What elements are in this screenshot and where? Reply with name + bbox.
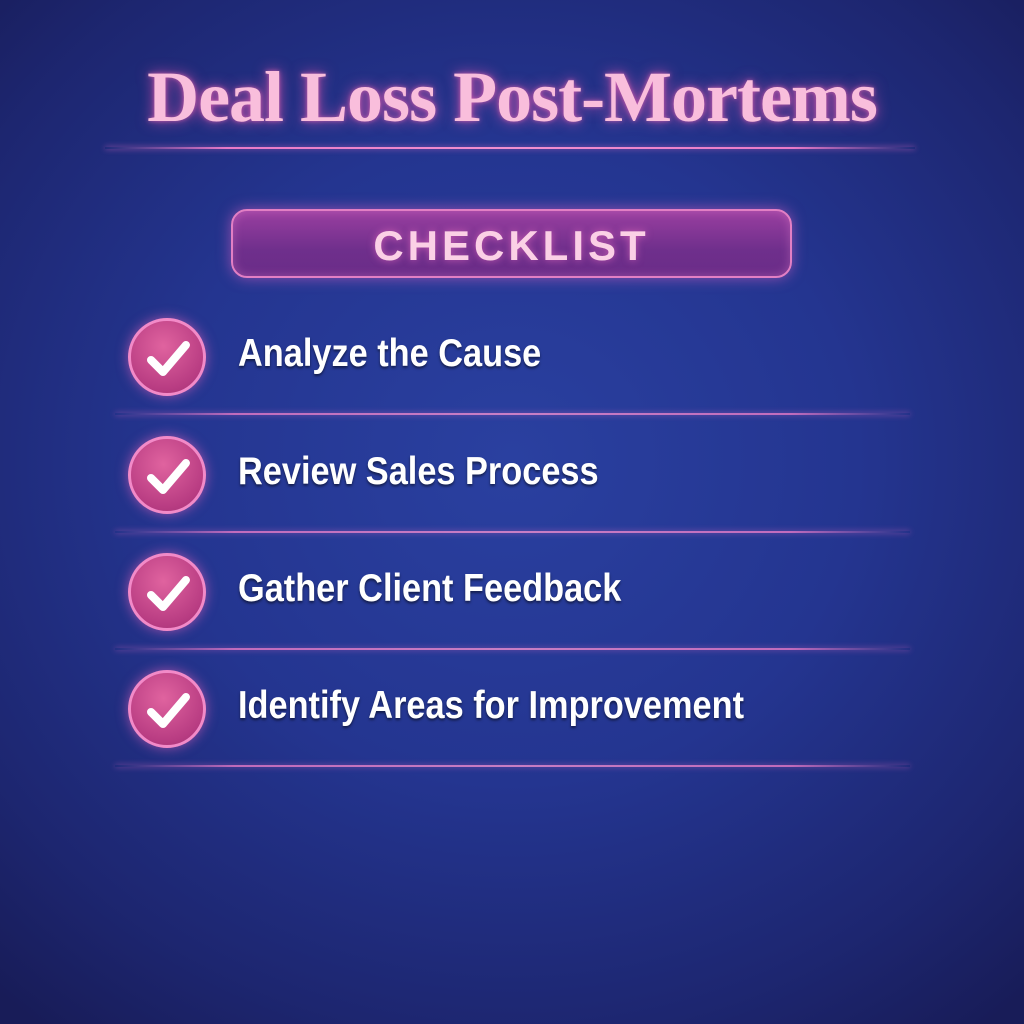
checklist header pill xyxy=(231,209,792,278)
title: Deal Loss Post-Mortems xyxy=(147,57,877,137)
item 2 xyxy=(120,428,599,522)
item 3 xyxy=(120,545,622,639)
icon: check xyxy=(128,318,206,396)
label: Analyze the Cause xyxy=(238,332,541,375)
icon: check xyxy=(128,670,206,748)
label: Gather Client Feedback xyxy=(238,567,621,610)
item 1 xyxy=(120,310,542,404)
icon: check xyxy=(128,553,206,631)
label: Review Sales Process xyxy=(238,450,599,493)
checklist header pill: CHECKLIST xyxy=(373,222,650,269)
icon: check xyxy=(128,436,206,514)
item 4 xyxy=(120,662,745,756)
label: Identify Areas for Improvement xyxy=(238,684,744,727)
